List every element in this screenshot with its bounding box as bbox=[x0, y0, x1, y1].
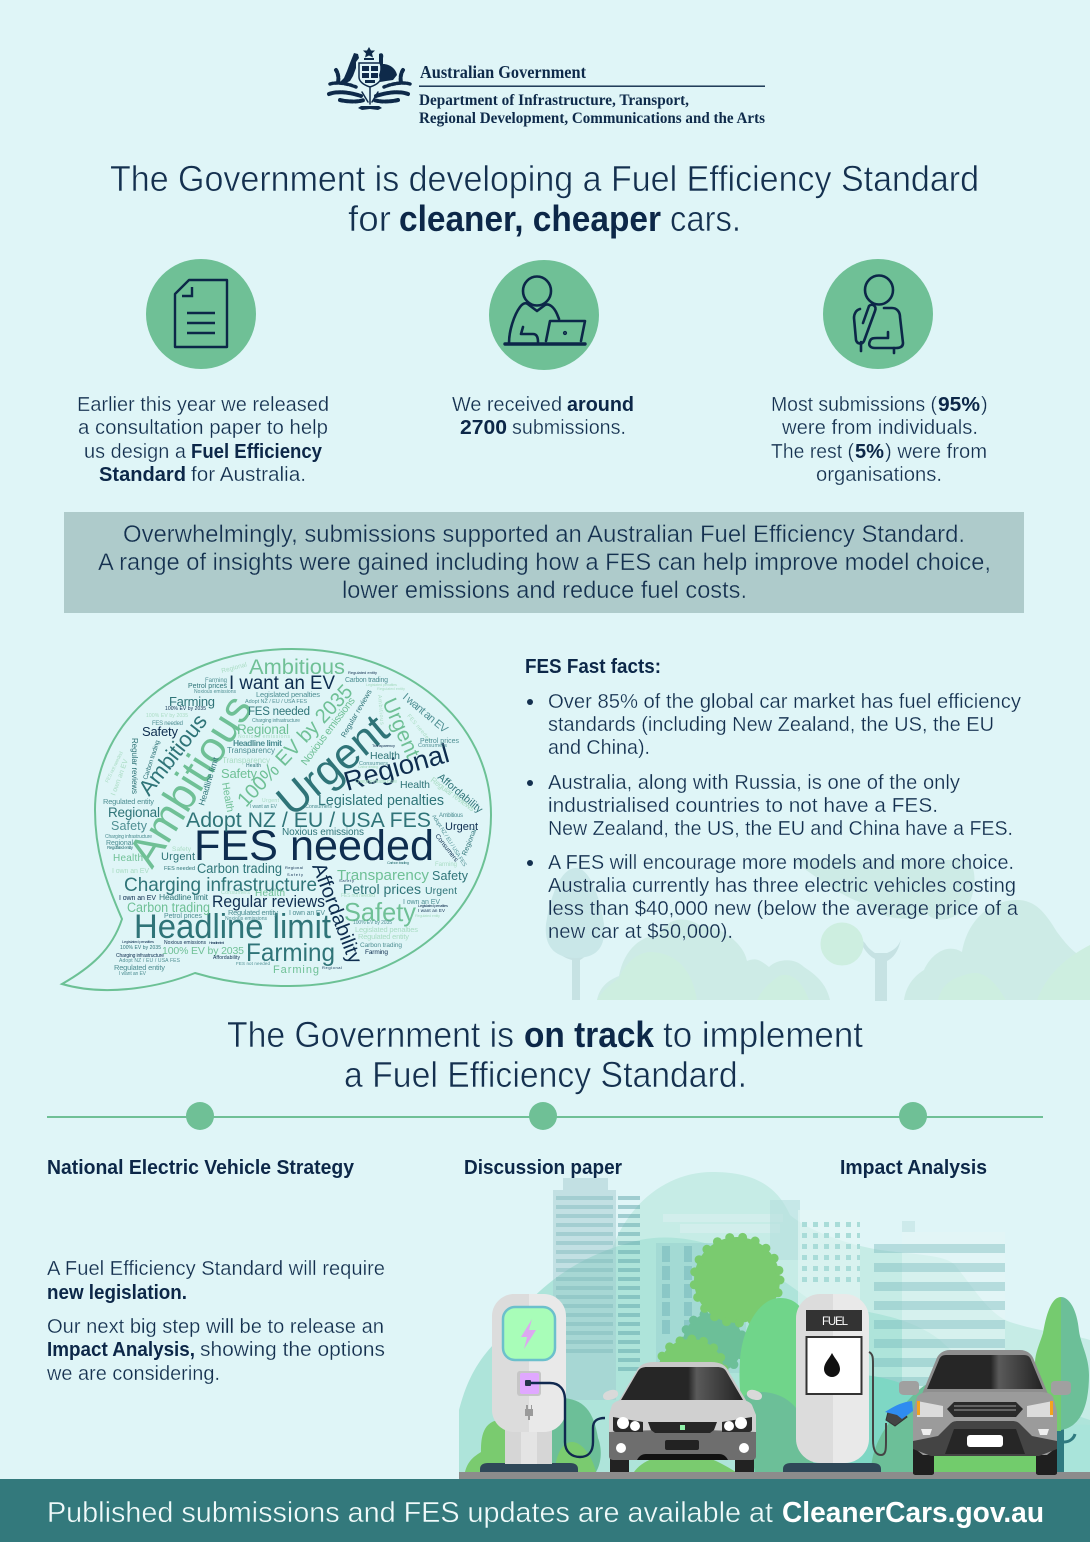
bullet: Australia and Russia bbox=[527, 772, 1013, 840]
background illustration: faded trees bbox=[546, 860, 1090, 1001]
horizontal words: Consumers bbox=[418, 743, 447, 749]
horizontal words: Safety bbox=[287, 872, 303, 877]
horizontal words: Adopt NZ / EU / USA FES bbox=[119, 958, 181, 964]
horizontal words: Consumers bbox=[221, 890, 250, 896]
large rotated words: Regional bbox=[221, 661, 248, 675]
horizontal words: Ambitious bbox=[249, 655, 345, 679]
text block: submission sources: The rest ( bbox=[771, 441, 854, 463]
horizontal words: Safety bbox=[172, 846, 192, 853]
horizontal words: I own an EV bbox=[119, 895, 156, 902]
bullet: global market bbox=[527, 691, 1021, 759]
text block: consultation paper bbox=[77, 394, 329, 486]
horizontal words: Transparency bbox=[227, 746, 275, 755]
large rotated words bbox=[104, 661, 485, 967]
horizontal words: Farming bbox=[169, 694, 215, 709]
logo: Australian Government: Regional Development, Communications and the Arts bbox=[419, 110, 765, 127]
horizontal words: Charging infrastructure bbox=[355, 779, 397, 785]
horizontal words: Urgent bbox=[425, 885, 457, 897]
horizontal words: Affordability bbox=[213, 955, 240, 961]
horizontal words: Health bbox=[113, 853, 143, 864]
horizontal words: Safety bbox=[339, 878, 354, 883]
bullet: models and choice: A FES will encourage more models and more choice. bbox=[548, 852, 1014, 874]
horizontal words: Carbon trading bbox=[387, 860, 409, 865]
horizontal words: Carbon trading bbox=[345, 677, 388, 684]
text block: submission sources: were from individuals. bbox=[781, 417, 978, 439]
large rotated words: Regional bbox=[461, 828, 479, 857]
text block: next steps: new legislation. bbox=[47, 1282, 187, 1304]
horizontal words: Regional bbox=[108, 805, 160, 820]
horizontal words: Petrol prices bbox=[188, 683, 228, 690]
icon: EV charger bbox=[480, 1294, 605, 1472]
text block: submission sources bbox=[771, 394, 988, 486]
title: cars. bbox=[670, 198, 741, 239]
horizontal words: Consumers bbox=[359, 761, 388, 767]
large rotated words: Consumers bbox=[433, 833, 460, 864]
horizontal words: Petrol prices bbox=[164, 913, 202, 920]
large rotated words: Urgent bbox=[377, 695, 424, 762]
text block: submissions received: We received bbox=[452, 394, 562, 416]
horizontal words: Safety bbox=[142, 724, 178, 739]
speech bubble outline bbox=[62, 649, 491, 990]
text block: next steps: Our next big step will be to release an bbox=[47, 1316, 384, 1338]
horizontal words: Petrol prices bbox=[420, 738, 460, 745]
large rotated words: Regular reviews bbox=[130, 738, 139, 794]
text block: next steps: showing the options bbox=[200, 1339, 385, 1361]
timeline labels bbox=[47, 1157, 987, 1179]
horizontal words: Noxious emissions bbox=[282, 827, 364, 838]
bullet: Australia and Russia: New Zealand, the US, the EU and China have a FES. bbox=[548, 818, 1013, 840]
icon: fuel pump: FUEL bbox=[822, 1316, 849, 1328]
horizontal words: Urgent bbox=[262, 798, 280, 804]
large rotated words: Ambitious bbox=[119, 687, 262, 875]
heading: on track bbox=[227, 1014, 863, 1095]
bullet: models and choice: less than $40,000 new (below the average price of a bbox=[548, 898, 1019, 920]
timeline labels: Discussion paper bbox=[464, 1157, 622, 1179]
horizontal words: Regulated entity bbox=[107, 845, 134, 850]
text block: submissions received: around bbox=[567, 394, 634, 416]
large rotated words: 100% EV by 2035 bbox=[233, 680, 357, 811]
horizontal words: Legislated penalties bbox=[318, 793, 444, 809]
horizontal words: Adopt NZ / EU / USA FES bbox=[245, 699, 307, 705]
bullet: models and choice bbox=[527, 852, 1019, 943]
horizontal words: Urgent bbox=[161, 851, 195, 863]
horizontal words: 100% EV by 2035 bbox=[353, 920, 392, 926]
horizontal words: Farming bbox=[205, 678, 227, 684]
bullet: global market: and China). bbox=[548, 737, 650, 759]
horizontal words: I own an EV bbox=[403, 899, 440, 906]
illustration: trees and bushes bbox=[465, 1237, 1089, 1472]
horizontal words: I want an EV bbox=[229, 673, 335, 694]
horizontal words: Legislated penalties bbox=[256, 690, 320, 699]
text block: next steps: we are considering. bbox=[46, 1363, 220, 1385]
horizontal words: I own an EV bbox=[112, 868, 149, 875]
timeline labels: National Electric Vehicle Strategy bbox=[47, 1157, 355, 1179]
large rotated words: Affordability bbox=[307, 860, 366, 967]
horizontal words: Health bbox=[370, 750, 400, 762]
horizontal words: Legislated penalties bbox=[122, 939, 154, 944]
horizontal words: Urgent bbox=[445, 821, 478, 833]
horizontal words: Legislated penalties bbox=[366, 682, 397, 687]
large rotated words: Regular reviews bbox=[339, 688, 374, 739]
horizontal words: Charging infrastructure bbox=[124, 874, 317, 896]
large rotated words: FES not needed bbox=[104, 750, 125, 784]
icon: document bbox=[146, 259, 256, 369]
horizontal words: FES not needed bbox=[341, 893, 375, 899]
large rotated words: Headline limit bbox=[196, 755, 221, 807]
bullet: Australia and Russia: industrialised countries to not have a FES. bbox=[548, 795, 938, 817]
horizontal words: Regional bbox=[106, 840, 133, 847]
bullet: models and choice: Australia currently has three electric vehicles costing bbox=[548, 875, 1016, 897]
horizontal words: Legislated penalties bbox=[418, 903, 448, 908]
logo: Australian Government bbox=[329, 47, 765, 127]
horizontal words: Regulated entity bbox=[377, 686, 405, 691]
horizontal words: Transparency bbox=[337, 867, 429, 884]
heading: on track: a Fuel Efficiency Standard. bbox=[344, 1054, 747, 1095]
horizontal words: Noxious emissions bbox=[164, 940, 206, 946]
horizontal words: Farming bbox=[273, 964, 319, 976]
horizontal words: Legislated penalties bbox=[355, 925, 418, 934]
horizontal words: Health bbox=[246, 763, 261, 769]
bullet: models and choice: new car at $50,000). bbox=[548, 921, 733, 943]
title: for bbox=[348, 198, 391, 239]
icon: person at laptop bbox=[489, 260, 599, 370]
text block: consultation paper: Fuel Efficiency bbox=[191, 441, 323, 463]
horizontal words: Safety bbox=[344, 897, 416, 927]
icon: silver electric car bbox=[603, 1362, 762, 1472]
panel: key message band: A range of insights were gained including how a FES can help improve model choice, bbox=[98, 549, 991, 576]
horizontal words: FES needed bbox=[248, 706, 310, 718]
road bbox=[459, 1472, 1090, 1479]
large rotated words: Regional bbox=[340, 738, 452, 797]
title: The Government is developing a Fuel Efficiency Standard bbox=[110, 158, 979, 199]
horizontal words: Headline limit bbox=[233, 738, 282, 748]
footer: Published submissions and FES updates are available at bbox=[47, 1497, 773, 1529]
horizontal words: FES needed bbox=[164, 866, 195, 872]
large rotated words: Carbon trading bbox=[142, 739, 162, 781]
horizontal words: Carbon trading bbox=[358, 764, 378, 769]
horizontal words: Ambitious bbox=[439, 813, 463, 819]
horizontal words: Petrol prices bbox=[343, 881, 421, 897]
charging cable bbox=[531, 1383, 605, 1457]
bullet: Australia and Russia: Australia, along with Russia, is one of the only bbox=[548, 772, 960, 794]
text block: submission sources: 5% bbox=[855, 441, 884, 463]
bullet: global market: standards (including New Zealand, the US, the EU bbox=[548, 714, 994, 736]
horizontal words: Regulated entity bbox=[103, 797, 154, 806]
horizontal words: Farming bbox=[435, 862, 457, 868]
text block: submission sources: Most submissions ( bbox=[771, 394, 937, 416]
icon: fuel pump bbox=[783, 1294, 913, 1472]
large rotated words: Ambitious bbox=[376, 695, 385, 725]
text block: submissions received bbox=[452, 394, 634, 439]
horizontal words: Noxious emissions bbox=[194, 689, 236, 695]
horizontal words: Carbon trading bbox=[127, 900, 210, 915]
horizontal words: Regulated entity bbox=[114, 963, 165, 972]
horizontal words: Carbon trading bbox=[360, 942, 402, 949]
fuel hose and nozzle bbox=[869, 1352, 886, 1455]
horizontal words: Regional bbox=[322, 965, 342, 970]
text block: submission sources: organisations. bbox=[816, 464, 942, 486]
illustration: city background bbox=[459, 1172, 1090, 1472]
heading: on track: to implement bbox=[663, 1014, 863, 1055]
horizontal words: Charging infrastructure bbox=[116, 953, 164, 959]
horizontal words: Regulated entity bbox=[415, 913, 440, 918]
icon: grey petrol car bbox=[899, 1350, 1071, 1475]
text block: consultation paper: for Australia. bbox=[191, 464, 306, 486]
horizontal words: Health bbox=[255, 888, 285, 899]
text block: next steps: Impact Analysis, bbox=[47, 1339, 195, 1361]
horizontal words: Headline limit bbox=[209, 940, 225, 945]
horizontal words: Noxious emissions bbox=[238, 734, 290, 740]
bullet: global market: Over 85% of the global car market has fuel efficiency bbox=[548, 691, 1021, 713]
large rotated words: Noxious emissions bbox=[299, 695, 358, 768]
large rotated words: I want an EV bbox=[400, 691, 450, 736]
horizontal words: Transparency bbox=[372, 743, 395, 748]
horizontal words: Safety bbox=[432, 869, 469, 883]
horizontal words: Regional bbox=[285, 865, 303, 870]
panel: key message band bbox=[64, 512, 1024, 613]
large rotated words: FES needed bbox=[405, 713, 432, 743]
horizontal words: Farming bbox=[365, 949, 388, 956]
horizontal words: Noxious emissions bbox=[225, 916, 268, 922]
text: government name: Australian Government bbox=[420, 62, 586, 82]
timeline bbox=[47, 1102, 1043, 1130]
large rotated words: Health bbox=[219, 781, 236, 813]
text block: consultation paper: us design a bbox=[84, 441, 187, 463]
horizontal words: 100% EV by 2035 bbox=[146, 713, 188, 719]
title: cleaner, cheaper bbox=[399, 198, 661, 239]
large rotated words: Adopt NZ / EU / USA FES bbox=[430, 814, 467, 868]
text block: submission sources: ) bbox=[981, 394, 988, 416]
text block: consultation paper: Standard bbox=[99, 464, 186, 486]
large rotated words: Affordability bbox=[435, 771, 485, 816]
horizontal words: Regional bbox=[237, 722, 289, 737]
horizontal words: FES needed bbox=[194, 822, 434, 870]
horizontal words: Health bbox=[400, 779, 430, 791]
horizontal words bbox=[103, 655, 478, 977]
title bbox=[110, 158, 979, 239]
horizontal words: Charging infrastructure bbox=[105, 834, 152, 840]
panel: key message band: Overwhelmingly, submissions supported an Australian Fuel Efficiency Standard. bbox=[123, 521, 965, 548]
horizontal words: Regular reviews bbox=[212, 893, 325, 911]
large rotated words: Ambitious bbox=[133, 709, 212, 800]
horizontal words: Charging infrastructure bbox=[252, 718, 300, 724]
heading: on track: The Government is bbox=[227, 1014, 514, 1055]
large rotated words: Regular reviews bbox=[429, 775, 476, 813]
buildings bbox=[553, 1178, 1005, 1405]
horizontal words: Regulated entity bbox=[228, 908, 278, 917]
horizontal words: Consumers bbox=[305, 804, 332, 810]
horizontal words: Safety bbox=[221, 766, 258, 781]
large rotated words: I own an EV bbox=[110, 758, 130, 797]
horizontal words: Adopt NZ / EU / USA FES bbox=[186, 809, 431, 832]
timeline labels: Impact Analysis bbox=[840, 1157, 987, 1179]
horizontal words: Transparency bbox=[222, 756, 270, 765]
horizontal words: Regulated entity bbox=[358, 932, 409, 941]
footer: CleanerCars.gov.au bbox=[782, 1497, 1044, 1529]
text block: submission sources: 95% bbox=[938, 394, 980, 416]
text block: consultation paper: a consultation paper to help bbox=[78, 417, 328, 439]
horizontal words: Regulated entity bbox=[348, 670, 377, 675]
horizontal words: Farming bbox=[246, 939, 335, 967]
text block: FES fast facts: FES Fast facts: bbox=[525, 656, 661, 678]
horizontal words: Carbon trading bbox=[197, 861, 282, 876]
icon: thinking person bbox=[823, 259, 933, 369]
text block: next steps bbox=[46, 1258, 385, 1385]
horizontal words: I want an EV bbox=[418, 908, 445, 913]
horizontal words: 100% EV by 2035 bbox=[120, 945, 161, 951]
text block: submissions received: submissions. bbox=[512, 417, 626, 439]
text block: next steps: A Fuel Efficiency Standard will require bbox=[47, 1258, 385, 1280]
horizontal words: Headline limit bbox=[134, 908, 332, 946]
horizontal words: Headline limit bbox=[159, 892, 209, 902]
horizontal words: I want an EV bbox=[119, 971, 147, 977]
panel: key message band: lower emissions and reduce fuel costs. bbox=[342, 577, 747, 604]
horizontal words: I want an EV bbox=[250, 804, 278, 810]
footer bbox=[0, 1479, 1090, 1542]
horizontal words: Safety bbox=[111, 819, 148, 833]
icon: coat of arms bbox=[329, 47, 410, 110]
large rotated words: Urgent bbox=[268, 705, 398, 826]
horizontal words: FES needed bbox=[152, 721, 183, 727]
text block: FES fast facts bbox=[525, 656, 1021, 943]
logo: Australian Government: Department of Infrastructure, Transport, bbox=[419, 92, 689, 109]
horizontal words: 100% EV by 2035 bbox=[165, 706, 206, 712]
horizontal words: 100% EV by 2035 bbox=[162, 945, 244, 957]
chart: word cloud speech bubble bbox=[62, 649, 491, 990]
text block: consultation paper: Earlier this year we released bbox=[77, 394, 329, 416]
text block: submission sources: ) were from bbox=[885, 441, 987, 463]
horizontal words: I own an EV bbox=[289, 910, 325, 917]
text block: submissions received: 2700 bbox=[460, 417, 507, 439]
horizontal words: FES not needed bbox=[236, 961, 270, 966]
heading: on track: on track bbox=[524, 1014, 655, 1055]
